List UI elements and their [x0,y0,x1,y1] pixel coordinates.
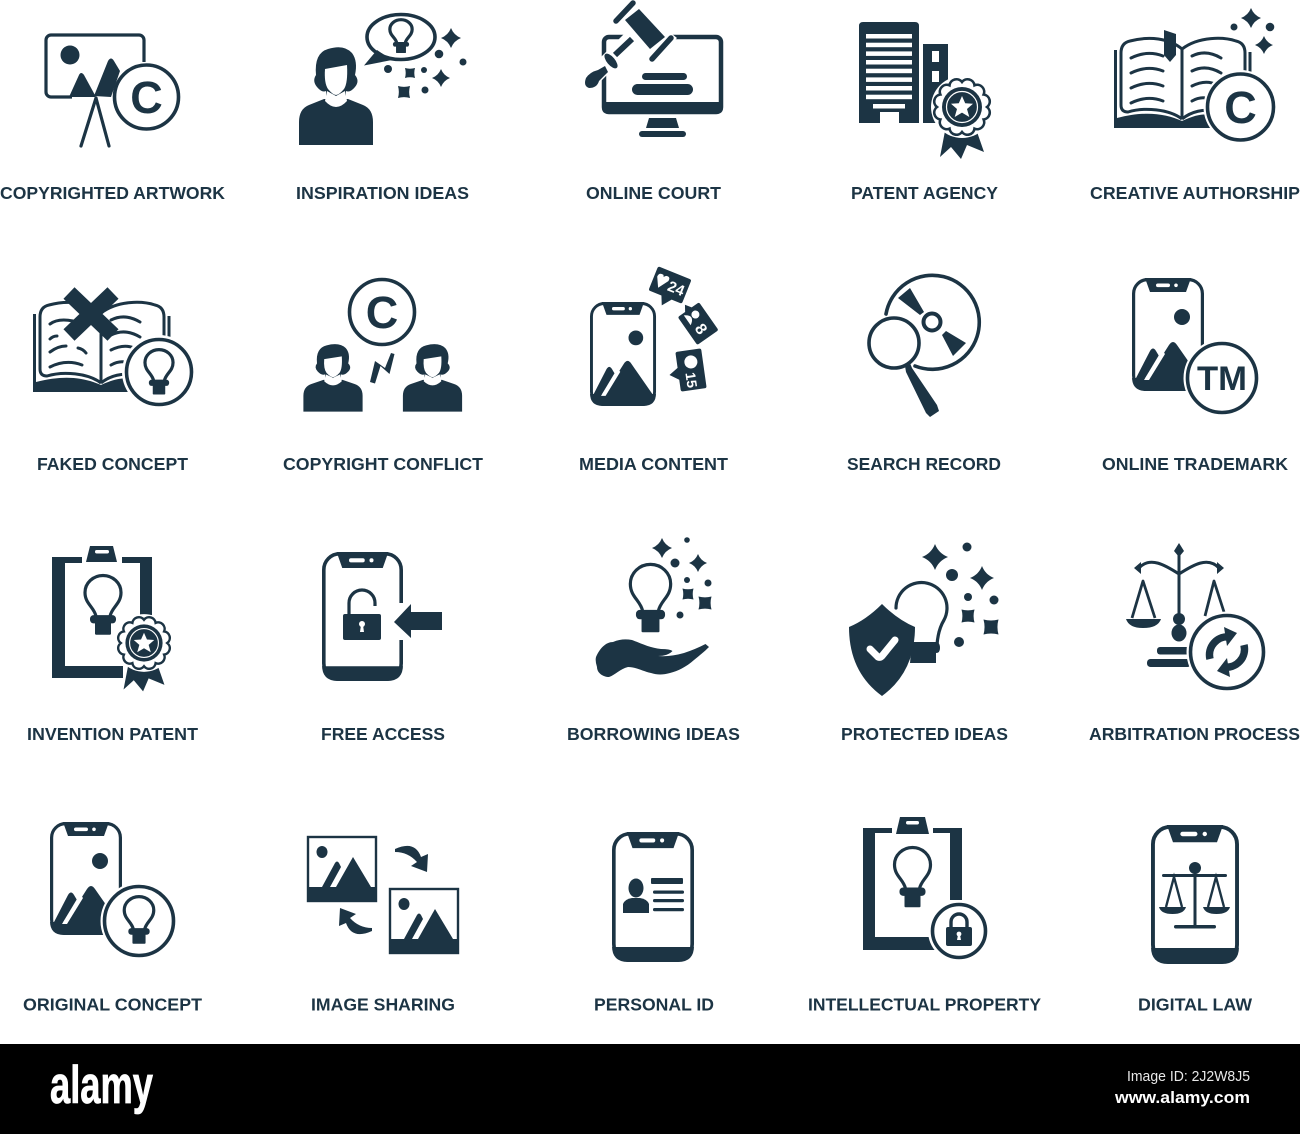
icon: media content: 15 [682,371,700,389]
icon: digital law [1151,825,1239,964]
icon: patent agency [859,22,993,159]
icon: image sharing [307,837,459,954]
footer image id: Image ID: 2J2W8J5 [1127,1069,1250,1085]
label: protected ideas: PROTECTED IDEAS [841,724,1008,744]
icon: personal id [612,832,694,962]
label: invention patent: INVENTION PATENT [27,724,198,744]
icon: copyright conflict: C [366,287,398,338]
label: free access: FREE ACCESS [321,724,445,744]
label: faked concept: FAKED CONCEPT [37,454,188,474]
label: media content: MEDIA CONTENT [579,454,728,474]
icon: creative authorship [1114,8,1278,144]
label: online trademark: ONLINE TRADEMARK [1102,454,1288,474]
icon: copyrighted artwork: C [130,72,163,123]
label: copyright conflict: COPYRIGHT CONFLICT [283,454,483,474]
icon: protected ideas [849,542,998,696]
icon: copyrighted artwork [46,35,178,146]
label: original concept: ORIGINAL CONCEPT [23,994,202,1014]
icon: inspiration ideas [299,14,466,145]
icon: borrowing ideas [596,537,712,677]
label: personal id: PERSONAL ID [594,994,714,1014]
icon: online court [585,0,723,137]
footer logo: alamy [50,1056,153,1115]
icon: invention patent [52,546,173,691]
label: inspiration ideas: INSPIRATION IDEAS [296,183,469,203]
icon: creative authorship: C [1224,82,1257,133]
icon: media content: 8 [691,321,710,338]
icon: search record [869,275,979,417]
label: copyrighted artwork: COPYRIGHTED ARTWORK [0,183,225,203]
icon: original concept [50,822,178,960]
icon: online trademark: TM [1197,360,1247,398]
label: patent agency: PATENT AGENCY [851,183,998,203]
label: image sharing: IMAGE SHARING [311,994,455,1014]
icon: arbitration process [1126,543,1268,692]
label: intellectual property: INTELLECTUAL PROPERTY [808,994,1041,1014]
icon: online trademark [1132,278,1260,416]
label: creative authorship: CREATIVE AUTHORSHIP [1090,183,1300,203]
label: search record: SEARCH RECORD [847,454,1001,474]
icon: free access [322,552,442,681]
footer url: www.alamy.com [1114,1088,1250,1107]
label: arbitration process: ARBITRATION PROCESS [1089,724,1300,744]
label: online court: ONLINE COURT [586,183,721,203]
icon: intellectual property [863,817,990,962]
icon: media content: 24 [665,278,687,300]
footer bar [0,1044,1300,1134]
icon: copyright conflict [303,280,462,412]
icon: faked concept [33,293,196,409]
label: borrowing ideas: BORROWING IDEAS [567,724,740,744]
label: digital law: DIGITAL LAW [1138,994,1252,1014]
icon: media content [590,266,719,406]
